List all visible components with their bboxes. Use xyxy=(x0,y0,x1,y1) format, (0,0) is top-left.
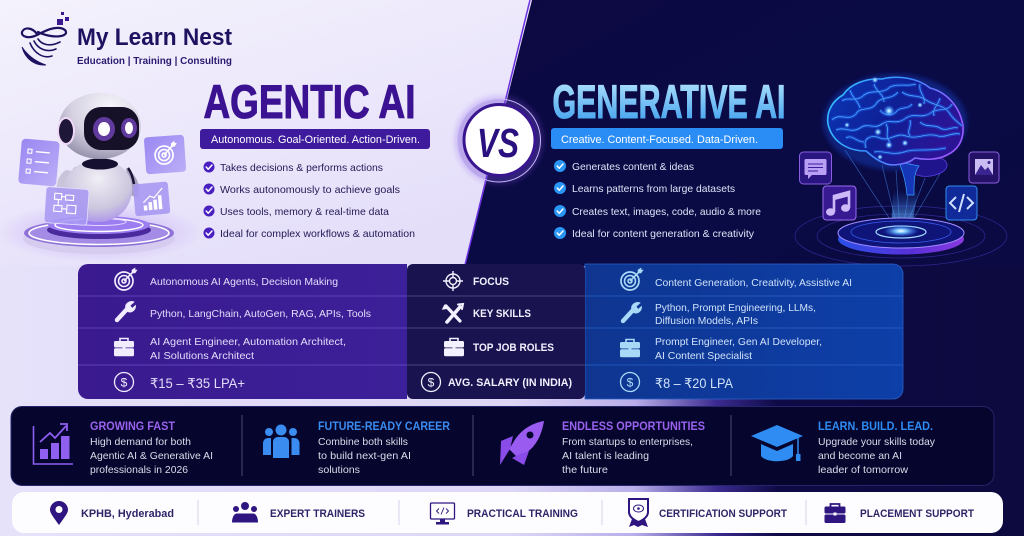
VS badge: VS xyxy=(477,120,519,166)
highlight: future-ready career: to build next-gen AI xyxy=(318,450,411,462)
panel: target xyxy=(144,135,186,174)
brain stem xyxy=(899,162,919,195)
logo wordmark: My Learn Nest xyxy=(77,24,232,51)
highlight: endless opportunities: the future xyxy=(562,464,608,476)
highlight: learn build lead xyxy=(751,421,936,476)
highlight: future-ready career: FUTURE-READY CAREER xyxy=(318,421,451,433)
background: light agentic side xyxy=(0,0,532,266)
VS badge xyxy=(454,95,544,185)
brain folds: lines xyxy=(832,84,962,153)
icon tile: music xyxy=(823,186,856,220)
list: Generative AI features xyxy=(554,160,761,240)
column: Generative AI values: Python, Prompt Engineering, LLMs, xyxy=(655,302,816,314)
column: Generative AI values: Prompt Engineer, Gen AI Developer, xyxy=(655,336,822,348)
highlights panel xyxy=(11,406,994,486)
list: Agentic AI features: Uses tools, memory & real-time data xyxy=(220,206,389,218)
list: Agentic AI features: Works autonomously to achieve goals xyxy=(220,184,400,196)
list: Generative AI features: Ideal for content generation & creativity xyxy=(572,228,755,240)
tagline: Agentic AI xyxy=(200,129,430,149)
icon tile: chat xyxy=(800,152,832,184)
highlight: future-ready career xyxy=(263,421,451,476)
column: category labels: KEY SKILLS xyxy=(473,308,531,320)
highlight: growing fast: High demand for both xyxy=(90,436,191,448)
illustration: robot on platform xyxy=(0,93,203,262)
column: Generative AI values: Content Generation, Creativity, Assistive AI xyxy=(655,277,852,289)
service: location xyxy=(50,501,174,525)
robot ear xyxy=(58,118,74,144)
icon tile: image xyxy=(969,152,999,183)
highlight: growing fast: GROWING FAST xyxy=(90,421,175,433)
panel: workflow map xyxy=(44,187,89,225)
column: Generative AI values: ₹8 – ₹20 LPA xyxy=(655,376,733,391)
column: Agentic AI values xyxy=(78,264,407,399)
service: placement: PLACEMENT SUPPORT xyxy=(860,508,974,520)
highlight: growing fast: Agentic AI & Generative AI xyxy=(90,450,213,462)
platform glow xyxy=(0,202,203,262)
highlight: learn build lead: and become an AI xyxy=(818,450,902,462)
tagline: Generative AI: Creative. Content-Focused. Data-Driven. xyxy=(561,134,758,146)
logo xyxy=(22,12,232,67)
list: Agentic AI features: Takes decisions & performs actions xyxy=(220,162,383,174)
logo mark xyxy=(22,12,69,65)
column: category labels: AVG. SALARY (IN INDIA) xyxy=(448,377,572,389)
highlight: endless opportunities xyxy=(500,421,705,476)
service: practical training xyxy=(430,503,578,524)
outer rings xyxy=(795,206,1007,266)
column: category labels: TOP JOB ROLES xyxy=(473,342,554,354)
tagline: Generative AI xyxy=(551,128,783,149)
column: category labels: FOCUS xyxy=(473,276,509,288)
list: Agentic AI features xyxy=(204,162,415,240)
diagonal divider line xyxy=(465,0,530,265)
brain folds: lobes xyxy=(832,84,962,153)
beam core xyxy=(891,190,918,232)
service: certification: CERTIFICATION SUPPORT xyxy=(659,508,787,520)
highlight: learn build lead: leader of tomorrow xyxy=(818,464,908,476)
column: Agentic AI values: AI Agent Engineer, Automation Architect, xyxy=(150,336,346,348)
brain outline xyxy=(828,77,963,165)
service: placement xyxy=(824,504,974,523)
service: expert trainers: EXPERT TRAINERS xyxy=(270,508,365,520)
platform xyxy=(838,218,964,254)
robot arms xyxy=(57,168,139,200)
robot visor xyxy=(84,107,139,150)
brain glow xyxy=(823,74,967,170)
column: Agentic AI values: ₹15 – ₹35 LPA+ xyxy=(150,376,245,391)
column: Agentic AI values: $ xyxy=(121,376,128,390)
list: Generative AI features: Generates content & ideas xyxy=(572,161,694,173)
column: Generative AI values: Diffusion Models, APIs xyxy=(655,315,758,327)
light beams xyxy=(845,150,945,230)
cerebellum xyxy=(910,157,947,176)
highlight: endless opportunities: From startups to enterprises, xyxy=(562,436,693,448)
robot neck xyxy=(82,158,118,170)
column: category labels: $ xyxy=(428,376,435,390)
robot head xyxy=(59,93,141,159)
column: Agentic AI values: AI Solutions Architect xyxy=(150,350,254,362)
column: Generative AI values: AI Content Specialist xyxy=(655,350,752,362)
panel: checklist xyxy=(18,138,60,187)
column: Generative AI values: $ xyxy=(627,376,634,390)
comparison table xyxy=(78,264,903,399)
panel: growth chart xyxy=(133,181,170,216)
platform xyxy=(23,216,175,254)
background: lower band transition xyxy=(0,266,1024,536)
list: Generative AI features: Creates text, images, code, audio & more xyxy=(572,206,761,218)
service: practical training: PRACTICAL TRAINING xyxy=(467,508,578,520)
heading: Generative AI: GENERATIVE AI xyxy=(552,75,786,128)
highlight: future-ready career: Combine both skills xyxy=(318,436,408,448)
services bar xyxy=(12,492,1003,533)
service: location: KPHB, Hyderabad xyxy=(81,508,174,520)
list: Agentic AI features: Ideal for complex workflows & automation xyxy=(220,228,415,240)
column: Agentic AI values: Python, LangChain, AutoGen, RAG, APIs, Tools xyxy=(150,308,371,320)
highlight: endless opportunities: AI talent is leading xyxy=(562,450,649,462)
highlight: endless opportunities: ENDLESS OPPORTUNITIES xyxy=(562,421,705,433)
column: category labels xyxy=(407,264,585,399)
highlight: future-ready career: solutions xyxy=(318,464,360,476)
tagline: Agentic AI: Autonomous. Goal-Oriented. Action-Driven. xyxy=(211,134,420,146)
highlight: growing fast: professionals in 2026 xyxy=(90,464,188,476)
highlight: learn build lead: Upgrade your skills today xyxy=(818,436,936,448)
highlight: growing fast xyxy=(34,421,213,476)
highlight: learn build lead: LEARN. BUILD. LEAD. xyxy=(818,421,933,433)
heading: Agentic AI: AGENTIC AI xyxy=(204,75,416,128)
icon tile: code xyxy=(946,186,977,220)
service: expert trainers xyxy=(232,502,365,522)
logo tagline: Education | Training | Consulting xyxy=(77,55,232,67)
illustration: glowing brain on platform xyxy=(795,74,1007,266)
robot eyes xyxy=(93,117,137,141)
list: Generative AI features: Learns patterns from large datasets xyxy=(572,183,735,195)
robot body xyxy=(64,160,132,222)
column: Generative AI values xyxy=(585,264,903,399)
column: Agentic AI values: Autonomous AI Agents, Decision Making xyxy=(150,276,338,288)
service: certification xyxy=(629,499,787,527)
neural nodes xyxy=(844,76,923,160)
